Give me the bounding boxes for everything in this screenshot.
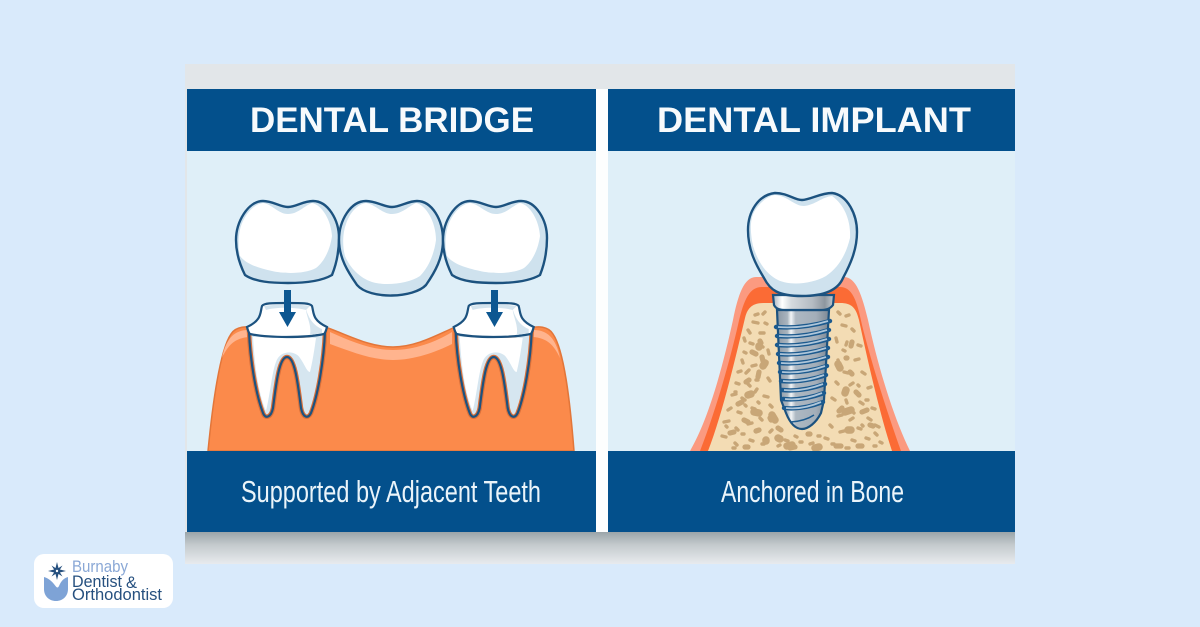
arrow: left crown down to tooth: [279, 290, 296, 327]
caption bar: supported by adjacent teeth: [187, 451, 596, 532]
implant collar: [773, 295, 834, 310]
bone pores large: [748, 346, 851, 448]
heading bar: dental implant: [608, 89, 1015, 151]
bone pores small: [722, 312, 882, 448]
illustration: gum inner layer: [700, 287, 901, 451]
illustration: implant screw: [773, 295, 834, 429]
heading bar: dental bridge: [187, 89, 596, 151]
logo text: Orthodontist: [72, 586, 162, 604]
bridge panel background: [187, 151, 596, 451]
illustration: right abutment tooth: [454, 303, 534, 417]
logo: Burnaby Dentist & Orthodontist: [34, 554, 173, 608]
caption bar: supported by adjacent teeth: Supported by Adjacent Teeth: [241, 474, 541, 509]
arrow: right crown down to tooth: [486, 290, 503, 327]
illustration: right crown: [443, 201, 547, 283]
white divider between panels: [596, 89, 608, 532]
illustration: gum outer layer: [690, 277, 910, 451]
logo text: Dentist: [72, 573, 122, 591]
illustration: left crown: [236, 201, 339, 283]
icon: tulip tooth: [44, 577, 68, 601]
caption bar: anchored in bone: [608, 451, 1015, 532]
logo text: &: [126, 574, 137, 592]
screw threads: [776, 321, 830, 408]
icon: sparkle: [48, 562, 66, 580]
illustration: middle pontic crown: [339, 201, 443, 296]
logo text: Burnaby: [72, 558, 129, 576]
illustration: implant crown: [748, 193, 857, 296]
panel: dental implant: [608, 89, 1015, 532]
caption bar: anchored in bone: Anchored in Bone: [721, 474, 904, 509]
heading bar: dental implant: DENTAL IMPLANT: [657, 101, 971, 140]
heading bar: dental bridge: DENTAL BRIDGE: [250, 101, 534, 140]
photo background card: [185, 64, 1015, 564]
illustration: bone: [708, 303, 892, 451]
logo text: [72, 558, 162, 604]
bone pores medium: [730, 341, 873, 448]
panel: dental bridge: [187, 89, 596, 532]
illustration: left abutment tooth: [247, 303, 327, 417]
implant panel background: [608, 151, 1015, 451]
illustration: gum: [208, 327, 574, 451]
